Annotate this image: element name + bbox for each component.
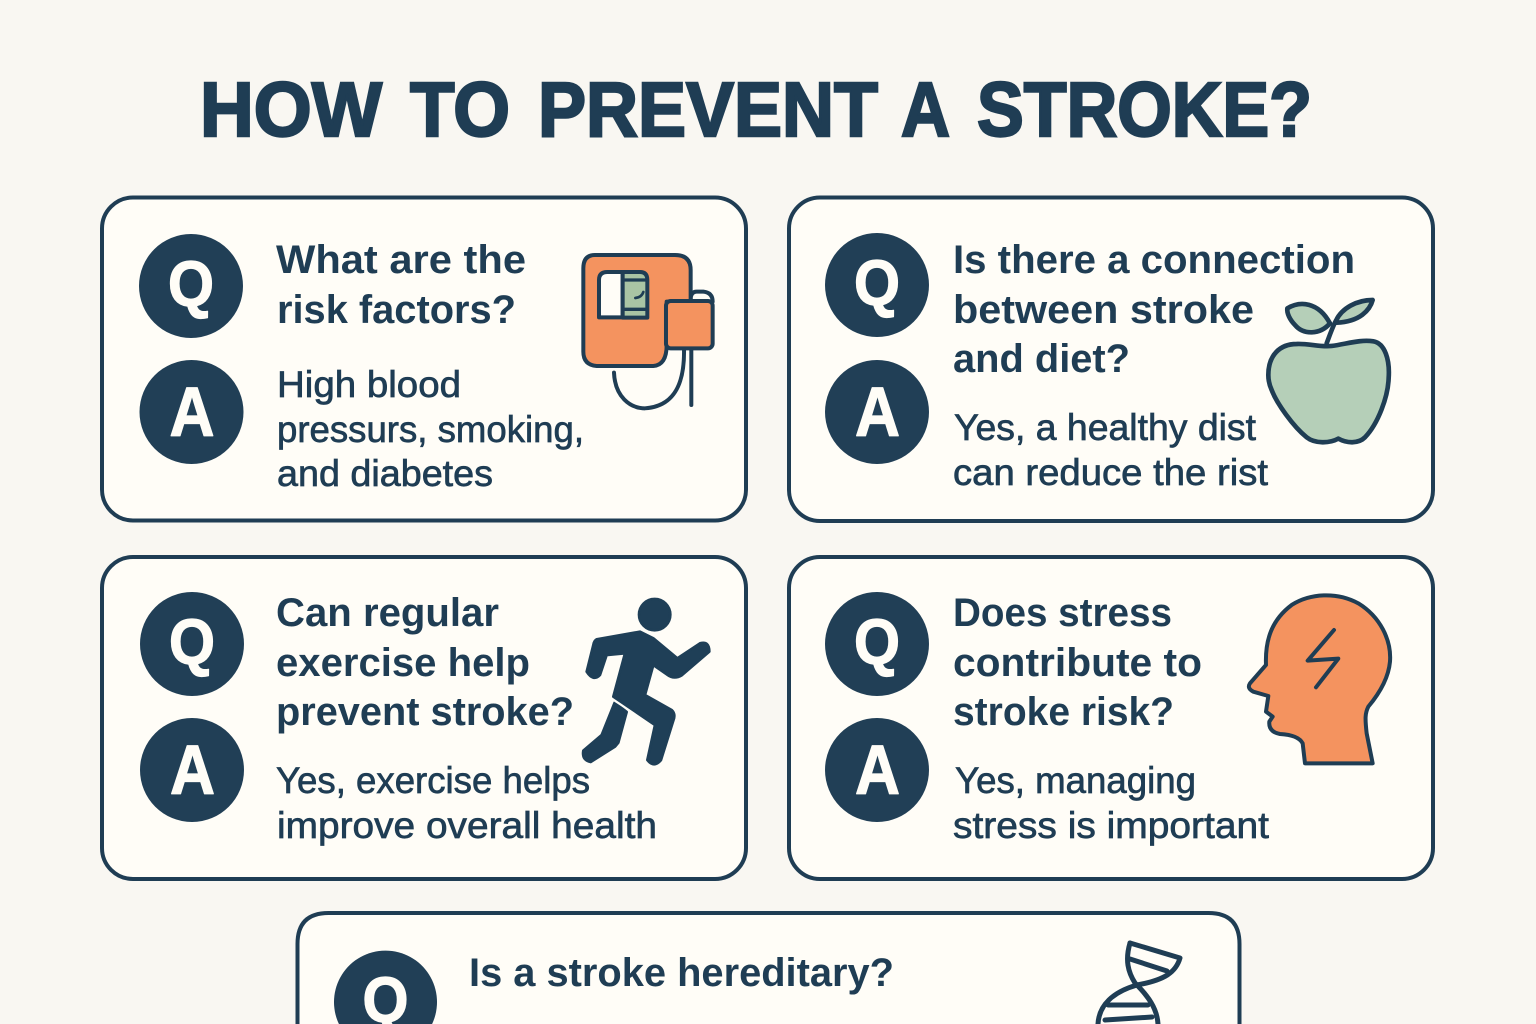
icon: DNA helix: [1098, 943, 1180, 1024]
Q badge: Q: [854, 247, 900, 319]
title: [200, 67, 1312, 153]
panel: diet: [789, 198, 1433, 521]
icon: blood pressure monitor: [583, 255, 713, 408]
answer text: and diabetes: [277, 453, 493, 494]
Q badge: [334, 951, 437, 1024]
question text: risk factors?: [277, 288, 516, 332]
answer text: pressurs, smoking,: [277, 409, 584, 450]
title: PREVENT: [538, 67, 878, 153]
answer text: [953, 760, 1270, 846]
question text: exercise help: [276, 641, 530, 685]
question text: Is there a connection: [953, 238, 1355, 282]
title: HOW: [200, 67, 382, 153]
question text: What are the: [276, 238, 526, 282]
answer text: High blood: [277, 364, 461, 405]
title: STROKE?: [977, 67, 1312, 153]
question text: [953, 238, 1355, 381]
A badge: [825, 360, 929, 464]
question text: Can regular: [276, 591, 499, 635]
title: TO: [410, 67, 510, 153]
A badge: A: [855, 731, 900, 809]
A badge: A: [855, 373, 900, 451]
answer text: Yes, exercise helps: [276, 760, 590, 801]
question text: prevent stroke?: [276, 690, 574, 734]
A badge: [140, 360, 244, 464]
icon: head with lightning bolt: [1249, 595, 1390, 763]
A badge: A: [170, 373, 214, 451]
question text: [276, 591, 574, 734]
panel: stress: [789, 557, 1433, 879]
A badge: A: [170, 731, 215, 809]
question text: contribute to: [953, 641, 1202, 685]
question text: [953, 591, 1202, 734]
answer text: stress is important: [953, 805, 1270, 846]
A badge: [140, 718, 244, 822]
panel: exercise: [102, 557, 746, 879]
question text: and diet?: [953, 337, 1130, 381]
title: A: [901, 67, 950, 153]
icon: apple: [1268, 300, 1389, 442]
answer text: improve overall health: [277, 805, 657, 846]
Q badge: Q: [854, 606, 900, 678]
Q badge: Q: [168, 248, 214, 320]
panel: hereditary: [298, 913, 1240, 1024]
A badge: [825, 718, 929, 822]
question text: stroke risk?: [953, 690, 1174, 734]
question text: [276, 238, 526, 332]
answer text: [277, 364, 584, 494]
Q badge: [825, 233, 929, 337]
answer text: [276, 760, 657, 846]
answer text: [953, 407, 1269, 493]
answer text: Yes, a healthy dist: [954, 407, 1257, 448]
answer text: Yes, managing: [955, 760, 1196, 801]
Q badge: [139, 234, 243, 338]
panel: risk factors: [102, 198, 746, 520]
icon: running figure: [583, 599, 709, 764]
answer text: can reduce the rist: [953, 452, 1269, 493]
question text: between stroke: [953, 288, 1254, 332]
question text: Does stress: [953, 591, 1172, 635]
Q badge: [140, 592, 244, 696]
Q badge: Q: [169, 606, 215, 678]
question text: Is a stroke hereditary?: [469, 951, 894, 995]
Q badge: [825, 592, 929, 696]
